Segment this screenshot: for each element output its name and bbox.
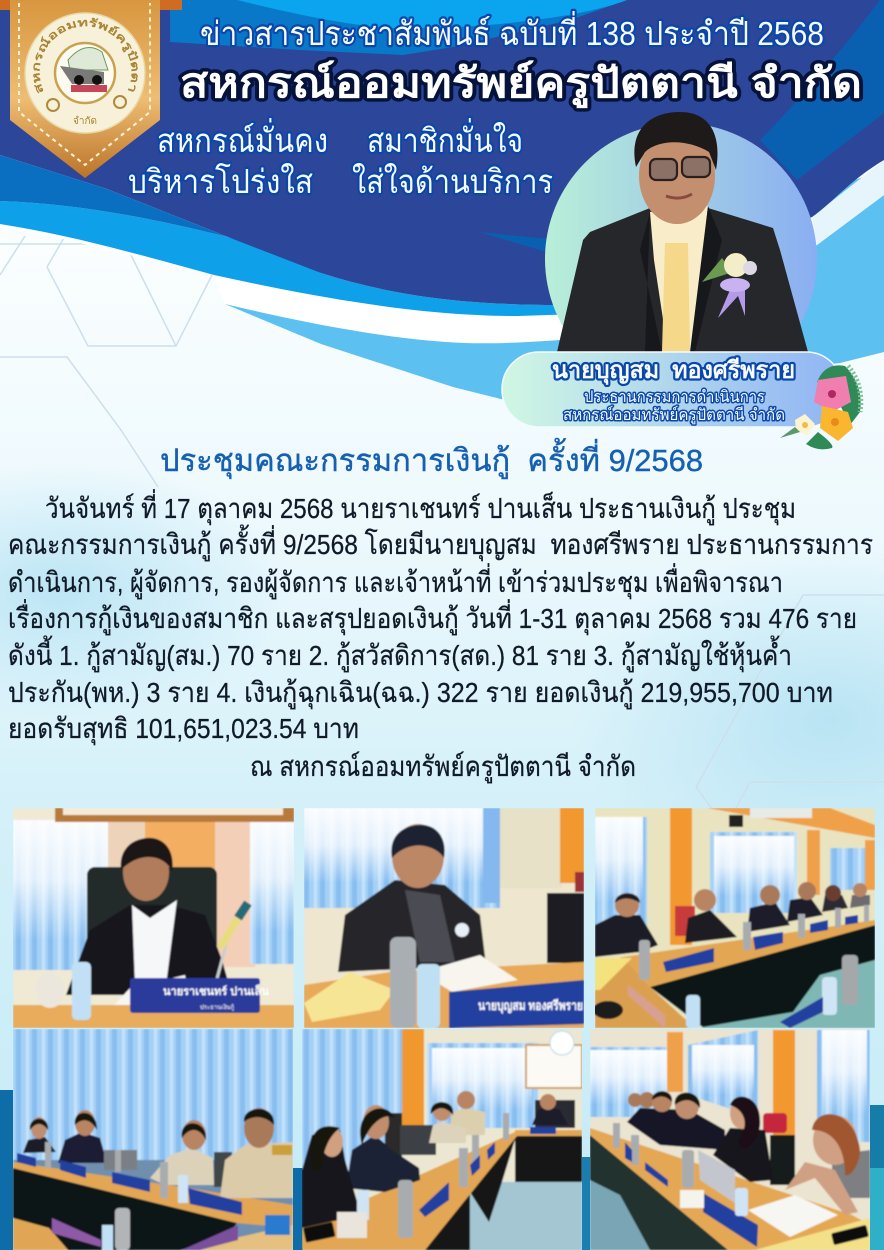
photo 2: committee member: นายบุญสม ทองศรีพราย bbox=[478, 998, 583, 1014]
slogans bbox=[128, 118, 553, 200]
seal: จำกัด bbox=[73, 116, 97, 127]
name plate: ประธานกรรมการดำเนินการ bbox=[584, 389, 765, 406]
icon: corsage bbox=[702, 253, 757, 318]
photo 1: chairman at desk bbox=[13, 808, 294, 1028]
slogans: บริหารโปร่งใส bbox=[128, 163, 313, 200]
photo 5: room with table corner bbox=[302, 1029, 582, 1250]
slogans: ใส่ใจด้านบริการ bbox=[352, 163, 553, 200]
portrait of chairman bbox=[557, 112, 808, 352]
photo 3: long table view bbox=[593, 808, 875, 1028]
slogans: สมาชิกมั่นใจ bbox=[367, 118, 523, 159]
news body text bbox=[8, 489, 873, 784]
photo 2: committee member bbox=[304, 808, 584, 1028]
title: สหกรณ์ออมทรัพย์ครูปัตตานี จำกัด bbox=[180, 60, 862, 109]
portrait circle bbox=[545, 123, 817, 395]
news body text: ยอดรับสุทธิ 101,651,023.54 บาท bbox=[8, 713, 359, 746]
photo 6: attendees with laptop bbox=[590, 1029, 870, 1250]
meeting heading: ประชุมคณะกรรมการเงินกู้ ครั้งที่ 9/2568 bbox=[160, 438, 703, 480]
news body text: ดังนี้ 1. กู้สามัญ(สม.) 70 ราย 2. กู้สวัสดิการ(สด.) 81 ราย 3. กู้สามัญใช้หุ้นค้ำ bbox=[8, 635, 792, 673]
photo 1: chairman at desk: นายราเชนทร์ ปานเส็น bbox=[163, 984, 269, 998]
header wave background bbox=[0, 0, 884, 400]
name plate: นายบุญสม ทองศรีพราย bbox=[552, 357, 795, 386]
name plate: สหกรณ์ออมทรัพย์ครูปัตตานี จำกัด bbox=[563, 405, 785, 425]
header line: ข่าวสารประชาสัมพันธ์ ฉบับที่ 138 ประจำปี 2568 bbox=[200, 11, 824, 52]
seal bbox=[24, 12, 146, 134]
name plate bbox=[502, 352, 843, 427]
slogans: สหกรณ์มั่นคง bbox=[157, 118, 328, 159]
news body text: ณ สหกรณ์ออมทรัพย์ครูปัตตานี จำกัด bbox=[250, 751, 636, 784]
flowers bbox=[780, 365, 861, 449]
photo 4: officers in uniform bbox=[13, 1029, 293, 1250]
photo 1: chairman at desk: ประธานเงินกู้ bbox=[200, 1004, 234, 1011]
banner with seal bbox=[0, 0, 182, 178]
